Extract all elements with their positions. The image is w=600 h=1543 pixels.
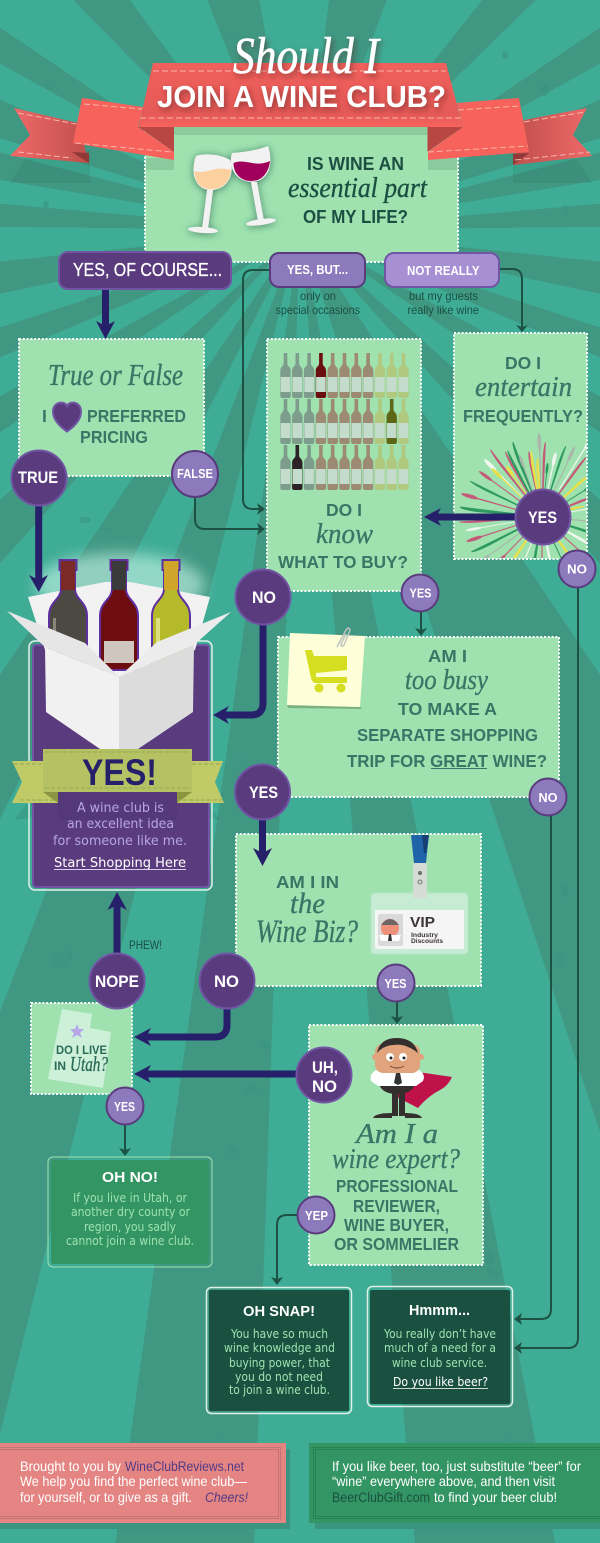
wine bottle rack — [280, 353, 409, 490]
decision circle: entertain yes — [516, 490, 570, 544]
decision circle: biz yes: YES — [384, 977, 406, 991]
panel: am I a wine expert: OR SOMMELIER — [334, 1234, 459, 1254]
panel: hmmm: Do you like beer? — [393, 1375, 488, 1389]
panel: hmmm: You really don’t have — [383, 1327, 496, 1341]
decision circle: know no: NO — [252, 589, 276, 607]
panel: do I live in Utah — [31, 1003, 132, 1094]
arrow: not really to do I entertain — [500, 269, 528, 332]
panel: hmmm: Hmmm... — [409, 1303, 470, 1319]
decision circle: entertain no: NO — [567, 562, 587, 576]
decision circle: busy yes: YES — [249, 784, 278, 802]
connector lines — [29, 269, 578, 1354]
caption: but my guests really like wine: really like wine — [408, 303, 479, 317]
footer: brought to you by: We help you find the perfect wine club— — [20, 1473, 247, 1489]
answer pill: not really: NOT REALLY — [407, 264, 480, 278]
soft glow behind bottles — [35, 553, 205, 617]
footer: beer club: to find your beer club! — [434, 1489, 557, 1505]
answer pill: not really — [385, 253, 499, 287]
decision circle: know yes: YES — [410, 586, 432, 600]
answer pill: yes but — [270, 253, 365, 287]
panel: am I in the wine biz: Wine Biz? — [256, 914, 358, 950]
caption: but my guests really like wine: but my guests — [409, 289, 478, 303]
panel: oh snap: OH SNAP! — [243, 1304, 315, 1320]
decision circle: biz no: NO — [214, 973, 239, 991]
caption: but my guests really like wine — [408, 289, 479, 317]
decision circle: know no — [236, 570, 290, 624]
panel: true or false: True or False — [48, 357, 183, 392]
decision circle: biz no — [200, 954, 254, 1008]
arrow: nope to yes panel — [108, 892, 127, 955]
arrow: false to do I know — [195, 498, 265, 535]
yes banner — [12, 749, 224, 803]
icon: VIP lanyard badge — [371, 835, 468, 954]
panel: do I know what to buy: DO I — [326, 500, 362, 520]
panel: am I in the wine biz — [236, 834, 481, 986]
answer pill: yes of course — [59, 252, 231, 289]
decision circle: know yes — [402, 574, 438, 612]
footer: brought to you by: Cheers! — [205, 1489, 248, 1505]
arrow: yep to oh snap — [271, 1215, 300, 1285]
decision circle: uh no: NO — [312, 1078, 337, 1096]
panel: oh snap: to join a wine club. — [229, 1383, 330, 1397]
panel: oh no: If you live in Utah, or — [73, 1191, 187, 1205]
decision circle: uh no — [296, 1048, 352, 1102]
footer: beer club: “wine” everywhere above, and then visit — [332, 1473, 555, 1489]
decision circle: nope — [90, 954, 144, 1008]
icon: clinking wine glasses — [188, 146, 276, 234]
decision circle: true: TRUE — [18, 469, 58, 487]
panel: too busy for shopping: TO MAKE A — [398, 699, 497, 719]
decision circle: yep — [298, 1196, 334, 1234]
arrow: no to yes panel — [213, 620, 263, 724]
footer: beer club — [309, 1443, 600, 1529]
question text — [288, 153, 428, 227]
panel: oh no — [48, 1157, 212, 1267]
panel: hmmm — [368, 1286, 512, 1406]
panel: oh snap: buying power, that — [229, 1356, 330, 1370]
panel: oh no: cannot join a wine club. — [66, 1234, 194, 1248]
icon: burst of cutlery — [459, 433, 586, 558]
panel: oh snap — [206, 1288, 352, 1414]
icon: VIP lanyard badge: Discounts — [411, 938, 443, 945]
arrow: wine biz yes to wine expert — [391, 1000, 403, 1024]
answer pill: yes but: YES, BUT... — [287, 263, 348, 277]
yes message: for someone like me. — [53, 833, 187, 849]
decision circle: utah yes: YES — [114, 1100, 135, 1114]
shadow under banner — [58, 792, 177, 820]
panel: hmmm: much of a need for a — [384, 1341, 496, 1355]
arrow: entertain no to hmmm — [514, 585, 578, 1354]
decision circle: busy no — [530, 778, 566, 816]
answer pill: yes of course: YES, OF COURSE... — [73, 260, 222, 280]
panel: am I a wine expert — [309, 1025, 483, 1265]
decision circle: biz yes — [378, 964, 414, 1002]
gift box — [7, 611, 231, 750]
footer: brought to you by: Brought to you by — [20, 1458, 121, 1474]
panel: oh no: OH NO! — [102, 1170, 158, 1186]
panel: is wine essential — [145, 125, 458, 262]
panel: oh snap: you do not need — [235, 1370, 323, 1384]
yes message — [53, 800, 187, 849]
tissue paper — [28, 582, 210, 677]
question text: IS WINE AN — [307, 153, 404, 174]
panel: oh no: region, you sadly — [84, 1220, 176, 1234]
panel: hmmm: wine club service. — [392, 1356, 487, 1370]
icon: VIP lanyard badge: Industry — [411, 932, 438, 939]
footer: beer club: BeerClubGift.com — [332, 1489, 430, 1505]
arrow: utah yes to oh no — [119, 1122, 131, 1156]
panel: am I in the wine biz: the — [290, 887, 325, 920]
icon: superhero wine expert — [371, 1038, 452, 1118]
arrow: yes, but to do I know — [243, 270, 269, 515]
title ribbon: JOIN A WINE CLUB? — [157, 79, 446, 114]
link: start shopping here: Start Shopping Here — [54, 855, 186, 871]
panel: am I a wine expert: PROFESSIONAL — [336, 1176, 458, 1196]
icon: sticky note with cart — [287, 628, 365, 709]
decision circle: true — [12, 450, 66, 506]
title text: Should I — [233, 28, 381, 85]
title ribbon — [10, 28, 592, 183]
panel: do I entertain frequently — [453, 332, 588, 560]
caption: only on special occasions — [276, 289, 360, 317]
panel: do I live in Utah: IN — [54, 1059, 66, 1073]
footer: brought to you by — [0, 1443, 290, 1529]
panel: oh no: another dry county or — [71, 1205, 190, 1219]
icon: VIP lanyard badge: VIP — [410, 914, 435, 931]
decision circle: entertain no — [558, 550, 596, 588]
yes message: an excellent idea — [67, 816, 174, 832]
panel: oh snap: wine knowledge and — [224, 1341, 335, 1355]
panel: do I live in Utah: DO I LIVE — [56, 1043, 107, 1057]
decision circle: uh no: UH, — [312, 1059, 338, 1077]
panel: true or false: I — [42, 406, 47, 426]
decision circle: entertain yes: YES — [528, 509, 557, 527]
icon: star — [70, 1024, 84, 1038]
footer: brought to you by: for yourself, or to give as a gift. — [20, 1489, 192, 1505]
panel: true or false — [19, 339, 204, 476]
caption: only on special occasions: special occasions — [276, 303, 360, 317]
decision circle: yep: YEP — [305, 1209, 328, 1223]
caption: only on special occasions: only on — [300, 289, 336, 303]
panel: do I entertain frequently: FREQUENTLY? — [463, 406, 583, 426]
arrow: too busy no to hmmm — [514, 810, 551, 1325]
bottles in the box — [49, 560, 190, 670]
decision circle: busy yes — [235, 764, 290, 820]
panel: do I live in Utah: Utah? — [70, 1052, 108, 1076]
panel: am I a wine expert: REVIEWER, — [353, 1196, 440, 1216]
panel: true or false: PRICING — [80, 427, 148, 447]
panel: am I a wine expert: wine expert? — [332, 1143, 460, 1175]
panel: am I in the wine biz: AM I IN — [276, 872, 339, 892]
panel: too busy for shopping: SEPARATE SHOPPING — [357, 725, 538, 745]
decision circle: nope: NOPE — [95, 973, 139, 991]
decision circle: busy no: NO — [538, 791, 558, 805]
panel: too busy for shopping: TRIP FOR GREAT WINE? — [347, 751, 547, 771]
arrow: entertain yes to do I know — [424, 508, 520, 526]
yes banner: YES! — [82, 752, 157, 793]
panel: oh snap: You have so much — [230, 1327, 328, 1341]
caption: phew: PHEW! — [129, 938, 162, 952]
panel: true or false: PREFERRED — [87, 406, 186, 426]
arrow: true to yes panel — [29, 505, 48, 592]
panel: am I a wine expert: WINE BUYER, — [344, 1215, 449, 1235]
decision circle: utah yes — [106, 1088, 144, 1124]
arrow: yes, of course to true or false — [96, 290, 115, 339]
question text: essential part — [288, 172, 428, 204]
arrow: too busy yes to wine biz — [253, 815, 272, 866]
panel: too busy for shopping: AM I — [428, 646, 467, 666]
panel: do I know what to buy: WHAT TO BUY? — [278, 552, 408, 572]
panel: do I entertain frequently: DO I — [505, 353, 541, 373]
panel: too busy for shopping: too busy — [405, 664, 488, 696]
arrow: wine biz no to utah — [134, 1005, 227, 1046]
decision circle: false: FALSE — [177, 467, 213, 481]
icon: Utah state shape — [48, 1009, 111, 1088]
panel: am I a wine expert: Am I a — [354, 1118, 438, 1150]
yes message: A wine club is — [77, 800, 164, 816]
panel: do I know what to buy — [267, 339, 421, 591]
panel: do I know what to buy: know — [316, 518, 374, 550]
arrow: uh no to utah — [134, 1065, 300, 1083]
question text: OF MY LIFE? — [303, 206, 408, 227]
decision circle: false — [172, 451, 218, 497]
footer: brought to you by: WineClubReviews.net — [125, 1458, 244, 1474]
footer: beer club: If you like beer, too, just substitute “beer” for — [332, 1458, 581, 1474]
icon: heart — [53, 403, 81, 432]
panel: yes, a wine club is excellent — [7, 553, 231, 890]
panel: too busy for shopping — [278, 628, 559, 797]
panel: do I entertain frequently: entertain — [475, 371, 572, 403]
arrow: know yes to too busy — [415, 608, 427, 636]
